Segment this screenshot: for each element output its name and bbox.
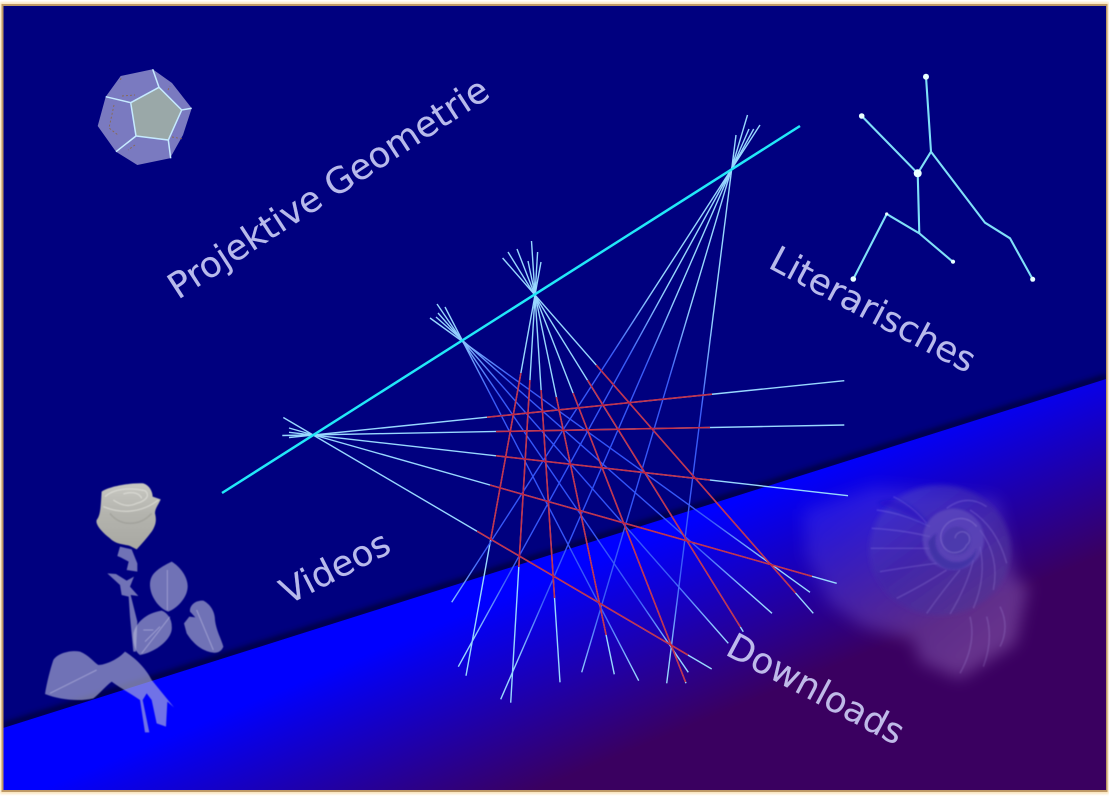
label: Projektive Geometrie: Projektive Geometrie bbox=[161, 69, 497, 308]
label: Downloads: Downloads bbox=[720, 626, 911, 753]
dodecahedron front face bbox=[131, 87, 182, 140]
icon: dodecahedron bbox=[98, 69, 192, 165]
label: Literarisches: Literarisches bbox=[763, 239, 983, 382]
cyan axis line bbox=[222, 126, 800, 493]
pencil through point B bbox=[430, 304, 810, 681]
pencil through point D bbox=[452, 115, 760, 699]
dodecahedron body bbox=[98, 69, 192, 165]
image: rose bbox=[45, 483, 223, 732]
diagram: projective line pencils bbox=[222, 115, 848, 703]
rose leaves and stem bbox=[45, 547, 223, 732]
rose bloom bbox=[96, 483, 161, 549]
pencil through point A bbox=[282, 381, 848, 669]
label: Videos: Videos bbox=[273, 523, 397, 613]
image: nautilus shell bbox=[803, 485, 1028, 678]
red lattice segments bbox=[477, 365, 812, 682]
pencil through point C bbox=[466, 241, 813, 703]
icon: constellation bbox=[850, 74, 1035, 282]
